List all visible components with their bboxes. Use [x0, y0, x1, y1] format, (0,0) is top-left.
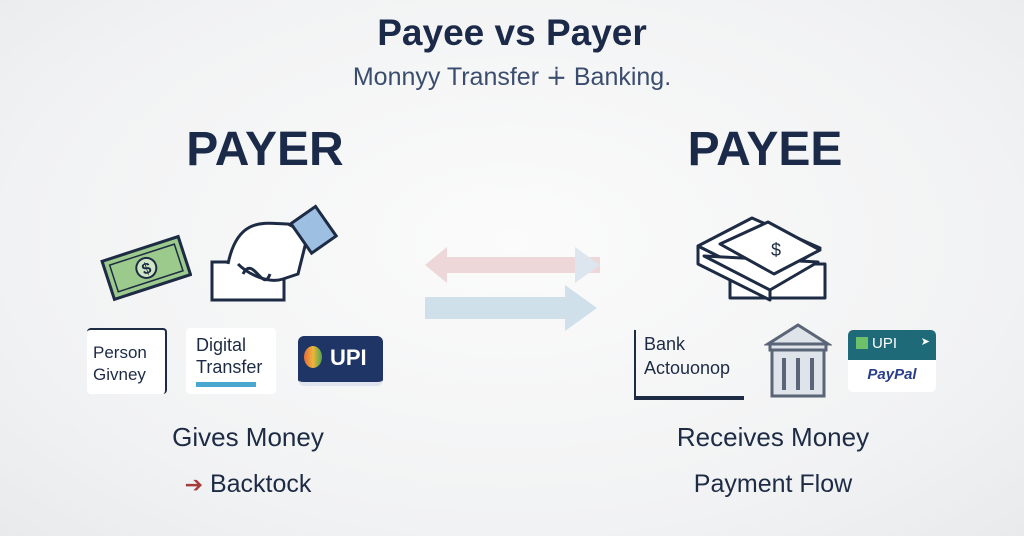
- card: digital transfer: Transfer: [196, 357, 262, 377]
- card: bank account: Bank: [644, 334, 685, 354]
- icon: bank building: [764, 323, 832, 398]
- text: gives money: Gives Money: [172, 422, 324, 452]
- text: receives money: Receives Money: [677, 422, 869, 452]
- card: bank account: Actouonop: [644, 358, 730, 378]
- logo: UPI PayPal: UPI: [872, 335, 897, 352]
- arrow: right blue: [425, 285, 597, 331]
- icon: hand giving cash: [210, 204, 338, 302]
- card: bank account: [634, 330, 744, 400]
- text: backtock: ➔ Backtock: [185, 470, 311, 498]
- subtitle: Monnyy Transfer ∔ Banking.: [353, 63, 671, 91]
- card: person givney: Givney: [93, 365, 146, 384]
- logo: UPI PayPal: [848, 330, 936, 392]
- icon: cash stack: $: [771, 240, 781, 260]
- arrow: left pink: [425, 247, 600, 283]
- icon: green dollar bill: [100, 234, 192, 302]
- icon: cash stack: [696, 216, 826, 302]
- heading: payer: PAYER: [186, 123, 344, 176]
- text: payment flow: Payment Flow: [694, 470, 852, 498]
- heading: payee: PAYEE: [688, 123, 842, 176]
- card: person givney: Person: [93, 343, 147, 362]
- icon: green dollar bill: $: [140, 260, 154, 279]
- card: digital transfer: [186, 328, 276, 394]
- card: digital transfer: Digital: [196, 335, 246, 355]
- card: person givney: [87, 328, 167, 394]
- title: Payee vs Payer: [377, 12, 647, 53]
- logo: UPI: UPI: [330, 345, 367, 370]
- logo: UPI PayPal: ➤: [921, 336, 930, 348]
- logo: UPI: [298, 336, 383, 386]
- logo: UPI PayPal: PayPal: [867, 366, 917, 383]
